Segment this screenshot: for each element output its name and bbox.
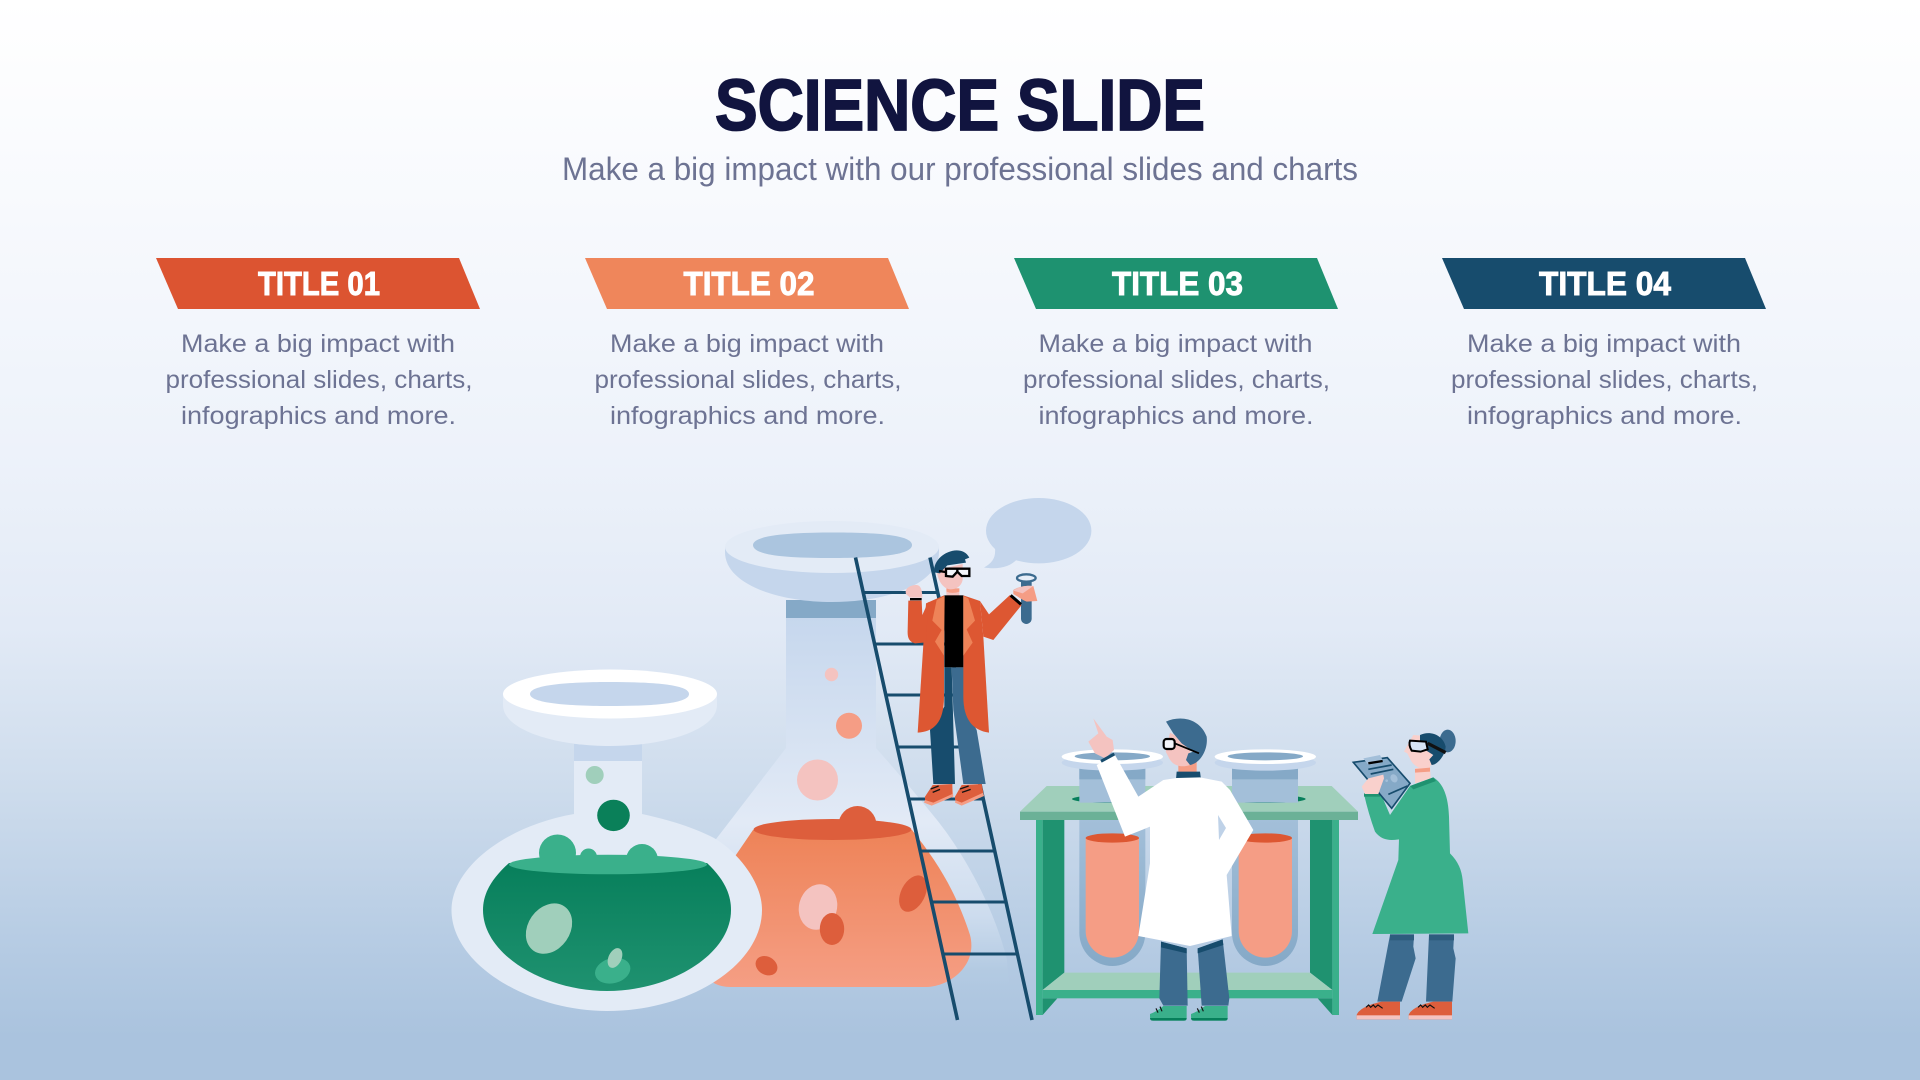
- text block 02: Make a big impact with: [610, 330, 884, 358]
- test tube right: [1215, 749, 1316, 966]
- text block 01: [166, 330, 472, 430]
- heading 01: TITLE 01: [258, 265, 380, 302]
- text block 04: [1451, 330, 1758, 430]
- test tube left: [1062, 749, 1163, 966]
- heading 03: TITLE 03: [1112, 265, 1243, 302]
- icon: test tube rack: [1020, 749, 1358, 1015]
- text block 02: infographics and more.: [610, 402, 885, 430]
- text block 02: [594, 330, 902, 430]
- text block 04: Make a big impact with: [1467, 330, 1741, 358]
- icon: large conical flask: [697, 521, 1009, 987]
- text block 01: professional slides, charts,: [166, 366, 472, 394]
- clipboard: [1353, 755, 1410, 808]
- subtitle: Make a big impact with our professional slides and charts: [562, 151, 1358, 187]
- icon: ladder: [856, 558, 1032, 1020]
- panel: title 03: [1014, 258, 1338, 430]
- banner 03: [1014, 258, 1338, 309]
- heading 04: TITLE 04: [1539, 265, 1672, 302]
- banner 01: [156, 258, 480, 309]
- text block 01: Make a big impact with: [181, 330, 455, 358]
- glasses: [939, 569, 969, 577]
- panel: title 01: [156, 258, 480, 430]
- banner 04: [1442, 258, 1766, 309]
- figure: scientist with clipboard: [1353, 730, 1468, 1019]
- text block 04: professional slides, charts,: [1451, 366, 1758, 394]
- heading 02: TITLE 02: [684, 265, 814, 302]
- text block 03: [1023, 330, 1330, 430]
- figure: man on ladder: [906, 550, 1037, 806]
- title: SCIENCE SLIDE: [715, 66, 1205, 146]
- text block 01: infographics and more.: [181, 402, 456, 430]
- panel: title 02: [585, 258, 909, 430]
- text block 03: professional slides, charts,: [1023, 366, 1330, 394]
- panel: title 04: [1442, 258, 1766, 430]
- icon: speech bubble: [984, 498, 1091, 568]
- rack table: [1020, 786, 1358, 1015]
- text block 03: Make a big impact with: [1038, 330, 1312, 358]
- icon: round-bottom flask: [452, 670, 762, 1011]
- text block 04: infographics and more.: [1467, 402, 1742, 430]
- figure: scientist in white coat: [1088, 718, 1253, 1021]
- banner 02: [585, 258, 909, 309]
- text block 02: professional slides, charts,: [594, 366, 902, 394]
- text block 03: infographics and more.: [1038, 402, 1314, 430]
- test tube: [1017, 574, 1036, 624]
